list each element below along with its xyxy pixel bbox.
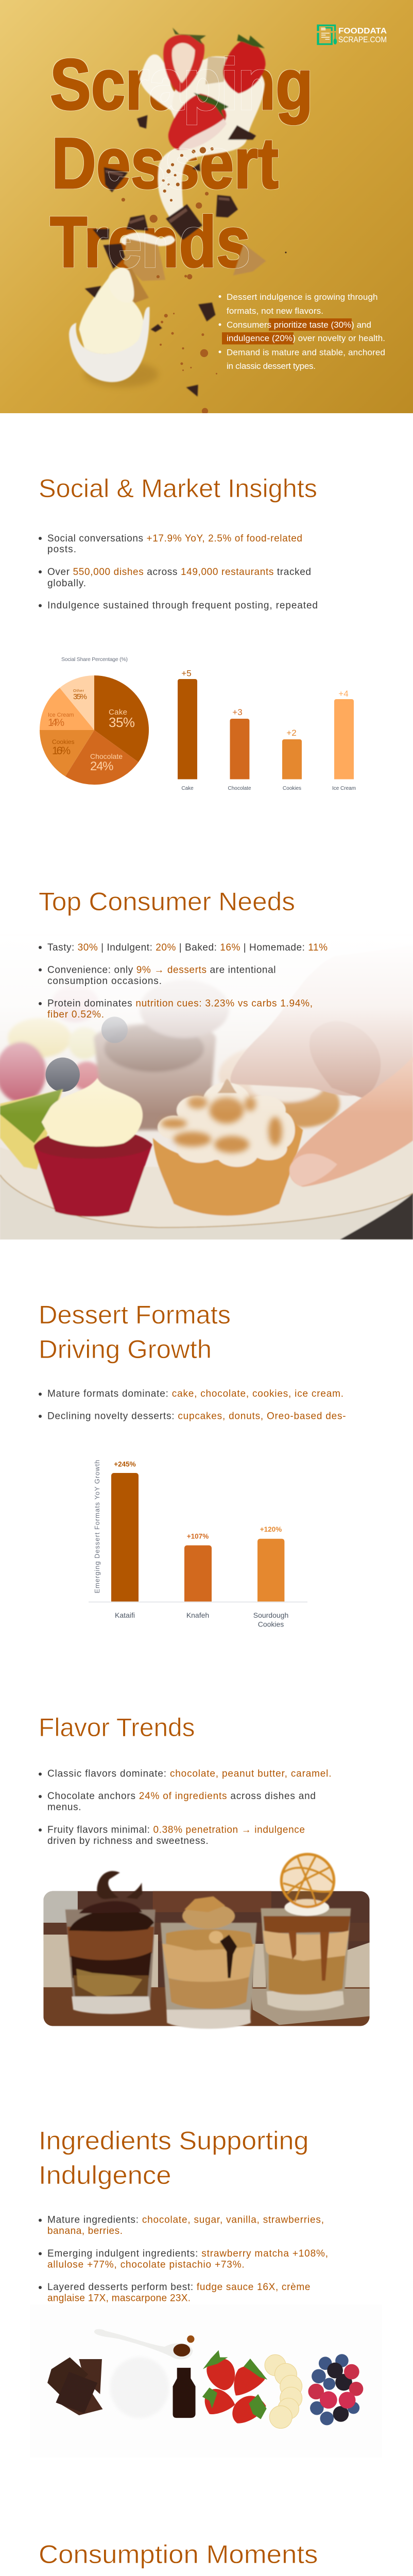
text block: ingredient bullets: anglaise 17X, mascarpone 23X. bbox=[47, 2293, 191, 2304]
chart: growth bars by category: Cookies bbox=[283, 786, 301, 791]
spoon bbox=[94, 2329, 193, 2360]
chart: social share pie: 16% bbox=[52, 745, 71, 757]
heading: Top Consumer Needs: Top Consumer Needs bbox=[39, 887, 295, 916]
text block: hero key points: Demand is mature and stable, anchored bbox=[227, 347, 385, 358]
heading: Ingredients Supporting Indulgence: Ingredients Supporting bbox=[39, 2126, 309, 2155]
chart: emerging dessert formats YoY growth: Knafeh bbox=[186, 1611, 209, 1619]
text block: hero key points bbox=[218, 292, 385, 371]
text block: social and market bullets: posts. bbox=[47, 544, 76, 555]
chart: emerging dessert formats YoY growth: +245% bbox=[114, 1460, 136, 1468]
chart: growth bars by category: +2 bbox=[286, 728, 297, 738]
title: Scraping Dessert Trends (white outline layer over the food): Scraping bbox=[50, 44, 313, 125]
text block: consumer needs bullets: Protein dominates nutrition cues: 3.23% vs carbs 1.94%, bbox=[47, 998, 313, 1009]
chart: social share pie: Social Share Percentage (%) bbox=[61, 656, 128, 663]
text block: ingredient bullets: banana, berries. bbox=[47, 2226, 123, 2236]
glass 3 bbox=[261, 1908, 351, 2010]
heading: Consumption Moments: Consumption Moments bbox=[39, 2540, 318, 2569]
title: Scraping Dessert Trends (white outline layer over the food) bbox=[50, 44, 313, 282]
glass 1 bbox=[65, 1909, 156, 2013]
chart: emerging dessert formats YoY growth: Emerging Dessert Formats YoY Growth bbox=[93, 1460, 101, 1594]
text block: hero key points: formats, not new flavors. bbox=[227, 306, 323, 316]
text block: dessert formats bullets: Mature formats dominate: cake, chocolate, cookies, ice cream. bbox=[47, 1388, 343, 1399]
title: Scraping Dessert Trends (white outline layer over the food): Dessert bbox=[51, 123, 279, 204]
heading: Ingredients Supporting Indulgence: Indulgence bbox=[39, 2161, 171, 2190]
chart: growth bars by category: Cake bbox=[181, 786, 194, 791]
text block: hero key points: indulgence (20%) over novelty or health. bbox=[227, 333, 385, 343]
chart: growth bars by category: Ice Cream bbox=[332, 786, 356, 791]
panel: flavor trends bbox=[39, 1713, 370, 2029]
chart: emerging dessert formats YoY growth bbox=[89, 1460, 307, 1628]
text block: flavor bullets: menus. bbox=[47, 1802, 81, 1812]
text block: dessert formats bullets bbox=[39, 1388, 346, 1422]
chart: growth bars by category: +5 bbox=[181, 669, 192, 678]
panel: top consumer needs bbox=[0, 887, 413, 1240]
chart: emerging dessert formats YoY growth: +107% bbox=[187, 1533, 209, 1540]
text block: flavor bullets bbox=[39, 1769, 332, 1846]
title: Scraping Dessert Trends (white outline layer over the food): Trends bbox=[50, 201, 250, 282]
text block: ingredient bullets: Layered desserts perform best: fudge sauce 16X, crème bbox=[47, 2282, 310, 2293]
chart: social share pie: 14% bbox=[48, 717, 64, 728]
panel: dessert formats driving growth bbox=[39, 1300, 346, 1628]
chart: social share pie: Other bbox=[73, 688, 84, 693]
text block: consumer needs bullets: Tasty: 30% | Indulgent: 20% | Baked: 16% | Homemade: 11% bbox=[47, 942, 328, 953]
chart: social share pie: 24% bbox=[90, 759, 113, 773]
title: Scraping Dessert Trends (filled layer): Trends bbox=[50, 201, 250, 282]
heading: Flavor Trends: Flavor Trends bbox=[39, 1713, 195, 1742]
text block: ingredient bullets: allulose +77%, chocolate pistachio +73%. bbox=[47, 2260, 245, 2270]
heading: Dessert Formats Driving Growth: Dessert Formats bbox=[39, 1300, 231, 1329]
logo: FoodDataScrape header: SCRAPE.COM bbox=[338, 36, 387, 44]
photo: cupcake and meringue tart on a plate with a hand, fading into white bbox=[0, 935, 413, 1240]
text block: social and market bullets: globally. bbox=[47, 578, 86, 589]
chart: emerging dessert formats YoY growth: Cookies bbox=[258, 1620, 284, 1628]
panel: ingredients supporting indulgence bbox=[39, 2126, 364, 2429]
text block: flavor bullets: Fruity flavors minimal: 0.38% penetration → indulgence bbox=[47, 1825, 305, 1835]
chart: social share pie: Cake bbox=[109, 708, 127, 717]
strawberries bbox=[205, 2359, 266, 2424]
chart: social share pie: Ice Cream bbox=[48, 712, 74, 718]
vanilla bottle bbox=[173, 2368, 196, 2418]
title: Scraping Dessert Trends (filled layer): Scraping bbox=[50, 44, 313, 125]
chart: growth bars by category: +3 bbox=[232, 707, 243, 717]
chart: social share pie: 35% bbox=[109, 715, 135, 730]
panel: social and market insights bbox=[39, 474, 356, 791]
text block: hero key points: Consumers prioritize taste (30%) and bbox=[227, 320, 371, 330]
text block: flavor bullets: Classic flavors dominate: chocolate, peanut butter, caramel. bbox=[47, 1769, 332, 1780]
text block: ingredient bullets bbox=[39, 2215, 328, 2304]
text block: dessert formats bullets: Declining novelty desserts: cupcakes, donuts, Oreo-based des- bbox=[47, 1411, 346, 1422]
illustration: chocolate, sugar, vanilla, strawberries, banana and berries bbox=[30, 2304, 382, 2458]
glass 2 bbox=[161, 1923, 257, 2028]
banana slices bbox=[265, 2354, 302, 2429]
text block: social and market bullets: Social conversations +17.9% YoY, 2.5% of food-related bbox=[47, 533, 302, 544]
illustration: falling dessert with strawberries, cream, chocolate, cookies and cup bbox=[69, 28, 287, 414]
heading: Dessert Formats Driving Growth: Driving Growth bbox=[39, 1335, 212, 1364]
heading: Dessert Formats Driving Growth bbox=[39, 1300, 231, 1364]
text block: flavor bullets: driven by richness and sweetness. bbox=[47, 1836, 209, 1846]
chart: emerging dessert formats YoY growth: Kataifi bbox=[115, 1611, 135, 1619]
logo: FoodDataScrape header bbox=[317, 25, 387, 45]
logo: FoodDataScrape header: FOODDATA bbox=[338, 27, 387, 36]
photo: three layered dessert glasses bbox=[43, 1854, 370, 2029]
panel: hero bbox=[0, 0, 413, 413]
text block: flavor bullets: Chocolate anchors 24% of ingredients across dishes and bbox=[47, 1791, 316, 1802]
chart: emerging dessert formats YoY growth: Sourdough bbox=[253, 1611, 288, 1619]
title: Scraping Dessert Trends (filled layer): Dessert bbox=[51, 123, 279, 204]
chart: growth bars by category: +4 bbox=[338, 689, 349, 699]
hero background bbox=[0, 0, 413, 413]
chart: growth bars by category bbox=[178, 669, 356, 791]
text block: consumer needs bullets: Convenience: only 9% → desserts are intentional bbox=[47, 964, 276, 976]
heading: Ingredients Supporting Indulgence bbox=[39, 2126, 309, 2190]
text block: consumer needs bullets: fiber 0.52%. bbox=[47, 1009, 104, 1020]
text block: consumer needs bullets bbox=[39, 942, 328, 1020]
chart: social share pie bbox=[40, 656, 149, 785]
chart: growth bars by category: Chocolate bbox=[228, 786, 251, 791]
chart: social share pie: Cookies bbox=[52, 738, 74, 745]
text block: social and market bullets bbox=[39, 533, 318, 611]
text block: social and market bullets: Over 550,000 dishes across 149,000 restaurants tracked bbox=[47, 567, 311, 578]
text block: hero key points: Dessert indulgence is growing through bbox=[227, 292, 378, 302]
text block: hero key points: in classic dessert types. bbox=[227, 361, 316, 371]
chart: social share pie: 35% bbox=[73, 692, 87, 701]
text block: consumer needs bullets: consumption occasions. bbox=[47, 976, 162, 987]
text block: social and market bullets: Indulgence sustained through frequent posting, repeated bbox=[47, 600, 318, 611]
chart: emerging dessert formats YoY growth: +120% bbox=[260, 1526, 282, 1533]
text block: ingredient bullets: Emerging indulgent ingredients: strawberry matcha +108%, bbox=[47, 2248, 328, 2259]
mixed berries bbox=[308, 2354, 363, 2425]
text block: ingredient bullets: Mature ingredients: chocolate, sugar, vanilla, strawberries, bbox=[47, 2215, 324, 2226]
heading: Social & Market Insights: Social & Market Insights bbox=[39, 474, 317, 503]
chocolate pieces bbox=[47, 2357, 102, 2415]
sugar pile bbox=[110, 2357, 169, 2418]
title: Scraping Dessert Trends (filled layer) bbox=[50, 44, 313, 282]
chart: social share pie: Chocolate bbox=[90, 752, 123, 760]
